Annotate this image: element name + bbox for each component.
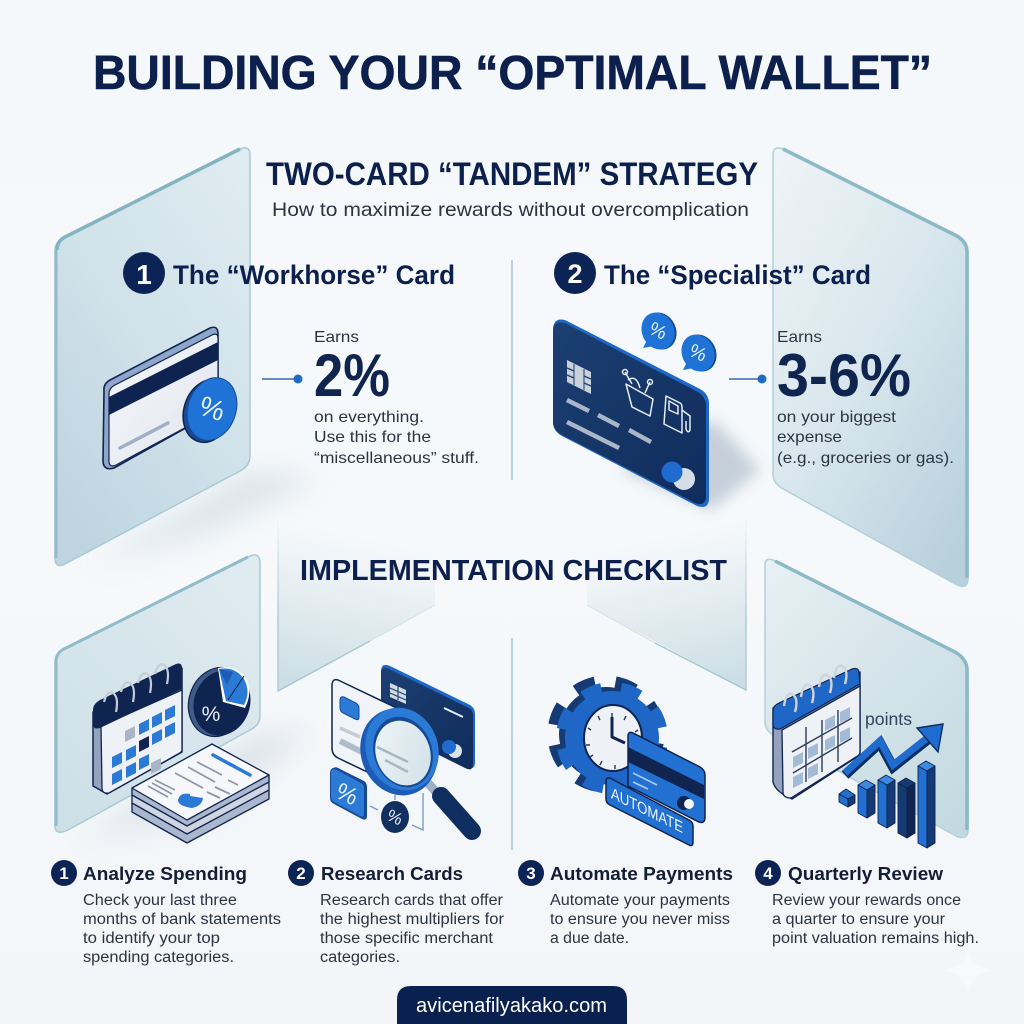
step 1: analyze spending: Check your last three: [83, 892, 237, 909]
connector arrow: [262, 374, 302, 384]
glass panel: top left: [55, 148, 250, 566]
subtitle: How to maximize rewards without overcomplication: [272, 199, 749, 221]
earn text: 3-6%: 3-6%: [777, 342, 911, 409]
footer pill: [397, 986, 627, 1024]
glass panel: center left wedge: [278, 520, 435, 691]
earn text: 2%: [314, 329, 479, 467]
icon: calendar, pie and statements: [93, 660, 269, 843]
fuel pump: [664, 396, 690, 433]
step 3: automate payments: to ensure you never miss: [550, 911, 730, 928]
earn text: 2%: Earns: [314, 329, 359, 346]
step 1: analyze spending: 1: [59, 864, 69, 883]
step 2: research cards: categories.: [320, 949, 400, 966]
icon: gear, clock and automate card: [549, 677, 705, 846]
badge 2: [554, 252, 596, 294]
percent bubbles: [635, 307, 723, 377]
percent tile: %: [331, 778, 362, 811]
icon: calendar and growth chart: [773, 666, 943, 848]
step 1: analyze spending: to identify your top: [83, 930, 220, 947]
soft panel shadows: [80, 470, 320, 838]
badge 1: 1: [136, 259, 152, 290]
glass panel: bottom left: [55, 555, 260, 832]
step 1: analyze spending: spending categories.: [83, 949, 234, 966]
glass panel: top right: [773, 148, 968, 586]
basket: [622, 370, 653, 416]
icon: white card with percent coin: %: [196, 390, 229, 427]
pie chart: [180, 660, 259, 744]
pie chart: %: [202, 703, 220, 726]
icon: magnifier over cards: [330, 665, 475, 833]
step 3: automate payments: a due date.: [550, 930, 629, 947]
step 1: analyze spending: [51, 860, 281, 966]
step 3: automate payments: Automate Payments: [550, 863, 733, 884]
glass panel: center right wedge: [587, 515, 746, 690]
panel: workhorse card: [103, 252, 479, 469]
icon: white card with percent coin: [103, 327, 245, 469]
heading: workhorse: The “Workhorse” Card: [173, 260, 455, 290]
step 2: research cards: those specific merchant: [320, 930, 494, 947]
step 2: research cards: the highest multipliers for: [320, 911, 504, 928]
panel: specialist card: [553, 252, 954, 507]
step 4: quarterly review: [755, 860, 979, 947]
step 4: quarterly review: a quarter to ensure your: [772, 911, 945, 928]
step 4: quarterly review: point valuation remains high.: [772, 930, 979, 947]
step 4: quarterly review: 4: [763, 864, 773, 883]
label: points: points: [865, 709, 912, 729]
step 2: research cards: 2: [296, 864, 306, 883]
glass panel: bottom right: [765, 559, 968, 838]
section heading: strategy: TWO-CARD “TANDEM” STRATEGY: [266, 156, 758, 192]
toggle dots: [673, 468, 695, 490]
step 3: automate payments: 3: [526, 864, 536, 883]
bar chart: [839, 761, 935, 848]
earn text: 3-6%: on your biggest: [777, 409, 897, 426]
connector arrow: [729, 374, 766, 384]
chip: [567, 360, 591, 394]
earn text: 2%: “miscellaneous” stuff.: [314, 450, 479, 467]
percent tile: [330, 767, 367, 820]
statement stack: [132, 744, 269, 843]
magnifying glass: [348, 697, 472, 831]
icon: dark card with categories: [553, 307, 723, 507]
step 3: automate payments: [518, 860, 733, 947]
heading: specialist: The “Specialist” Card: [604, 260, 871, 290]
soft shadow: specialist card: [620, 420, 760, 510]
badge 1: [123, 252, 165, 294]
earn text: 3-6%: expense: [777, 429, 842, 446]
section heading: checklist: IMPLEMENTATION CHECKLIST: [300, 555, 727, 587]
step 4: quarterly review: Quarterly Review: [788, 863, 944, 884]
badge 2: 2: [567, 259, 583, 289]
percent circle: [381, 801, 409, 833]
percent circle: %: [384, 806, 406, 829]
footer pill: avicenafilyakako.com: [416, 995, 607, 1017]
automate card: [628, 732, 705, 822]
earn text: 3-6%: [777, 329, 954, 467]
percent bubbles: %: [686, 340, 710, 367]
clock: [584, 705, 642, 771]
growth arrow: [845, 724, 943, 775]
automate label: AUTOMATE: [611, 784, 683, 837]
step 2: research cards: Research Cards: [321, 863, 463, 884]
step 4: quarterly review: Review your rewards once: [772, 892, 961, 909]
step 3: automate payments: Automate your payments: [550, 892, 730, 909]
earn text: 2%: Use this for the: [314, 429, 431, 446]
step 1: analyze spending: Analyze Spending: [83, 863, 247, 884]
earn text: 2%: on everything.: [314, 409, 424, 426]
percent bubbles: %: [646, 318, 670, 345]
step 1: analyze spending: months of bank statements: [83, 911, 281, 928]
earn text: 2%: 2%: [314, 342, 390, 409]
earn text: 3-6%: Earns: [777, 329, 822, 346]
title: BUILDING YOUR “OPTIMAL WALLET”: [93, 47, 932, 100]
step 2: research cards: [288, 860, 504, 966]
step 2: research cards: Research cards that offer: [320, 892, 503, 909]
earn text: 3-6%: (e.g., groceries or gas).: [777, 450, 954, 467]
